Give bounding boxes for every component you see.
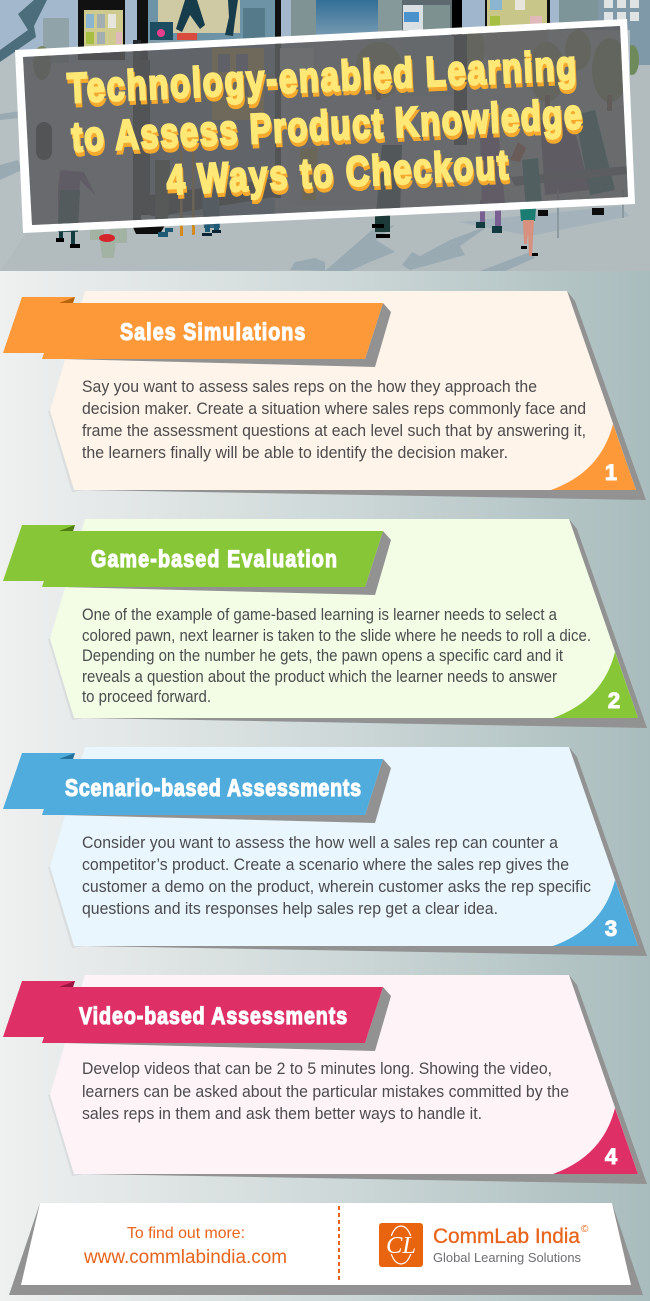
heading ribbon bbox=[3, 753, 391, 823]
body text bbox=[82, 377, 586, 462]
number 2: 2 bbox=[608, 688, 620, 713]
contact text: To find out more: bbox=[127, 1225, 245, 1242]
brand text: Global Learning Solutions bbox=[433, 1250, 581, 1265]
body text: colored pawn, next learner is taken to the slide where he needs to roll a dice. bbox=[82, 626, 591, 645]
body text: learners can be asked about the particular mistakes committed by the bbox=[82, 1082, 569, 1101]
panel: sales simulations bbox=[3, 291, 646, 500]
body text: One of the example of game-based learning is learner needs to select a bbox=[82, 605, 558, 624]
heading ribbon: Video-based Assessments bbox=[79, 1002, 347, 1029]
number 3: 3 bbox=[605, 916, 617, 941]
heading ribbon: Sales Simulations bbox=[120, 318, 305, 345]
title text: 4 Ways to Checkout bbox=[167, 145, 510, 207]
heading ribbon: Game-based Evaluation bbox=[91, 545, 337, 572]
body text bbox=[82, 833, 591, 918]
title banner bbox=[15, 19, 635, 233]
title text: Technology-enabled Learning bbox=[66, 42, 577, 112]
card shape bbox=[48, 747, 647, 956]
card shape bbox=[48, 975, 647, 1184]
header illustration bbox=[0, 0, 650, 271]
brand text bbox=[433, 1224, 589, 1265]
body text bbox=[82, 1059, 569, 1123]
brand text: CommLab India bbox=[433, 1225, 580, 1248]
heading ribbon bbox=[3, 981, 391, 1051]
page background bbox=[0, 271, 650, 1301]
banner dark panel bbox=[23, 26, 628, 225]
body text: questions and its responses help sales rep get a clear idea. bbox=[82, 899, 498, 918]
body text: competitor’s product. Create a scenario where the sales rep gives the bbox=[82, 855, 569, 874]
icon: CommLab logo: CL bbox=[386, 1233, 416, 1259]
heading ribbon: Scenario-based Assessments bbox=[65, 774, 361, 801]
body text: decision maker. Create a situation where sales reps commonly face and bbox=[82, 399, 586, 418]
body text: sales reps in them and ask them better ways to handle it. bbox=[82, 1104, 482, 1123]
icon: CommLab logo bbox=[379, 1223, 423, 1267]
panel: scenario-based assessments bbox=[3, 747, 647, 956]
title text: to Assess Product Knowledge bbox=[72, 94, 584, 164]
contact text bbox=[83, 1225, 287, 1268]
number 4: 4 bbox=[605, 1144, 618, 1169]
card shape bbox=[48, 291, 646, 500]
number 1: 1 bbox=[605, 460, 617, 485]
heading ribbon bbox=[3, 525, 391, 595]
title text: to Assess Product Knowledge bbox=[70, 90, 583, 160]
body text: the learners finally will be able to identify the decision maker. bbox=[82, 443, 508, 462]
body text: customer a demo on the product, wherein customer asks the rep specific bbox=[82, 877, 591, 896]
contact text: www.commlabindia.com bbox=[83, 1247, 287, 1268]
body text: to proceed forward. bbox=[82, 687, 211, 706]
body text bbox=[82, 605, 591, 706]
heading ribbon bbox=[3, 297, 391, 367]
card shape bbox=[48, 519, 647, 728]
panel: video-based assessments bbox=[3, 975, 647, 1184]
body text: Develop videos that can be 2 to 5 minutes long. Showing the video, bbox=[82, 1059, 552, 1078]
body text: Depending on the number he gets, the pawn opens a specific card and it bbox=[82, 646, 563, 665]
body text: reveals a question about the product which the learner needs to answer bbox=[82, 667, 557, 686]
brand text: © bbox=[581, 1224, 589, 1235]
title text: 4 Ways to Checkout bbox=[165, 141, 509, 203]
panel: game-based evaluation bbox=[3, 519, 647, 728]
footer panel bbox=[9, 1203, 643, 1295]
title text bbox=[66, 41, 586, 211]
body text: Consider you want to assess the how well a sales rep can counter a bbox=[82, 833, 559, 852]
body text: frame the assessment questions at each level such that by answering it, bbox=[82, 421, 586, 440]
body text: Say you want to assess sales reps on the how they approach the bbox=[82, 377, 537, 396]
title text: Technology-enabled Learning bbox=[67, 46, 578, 116]
